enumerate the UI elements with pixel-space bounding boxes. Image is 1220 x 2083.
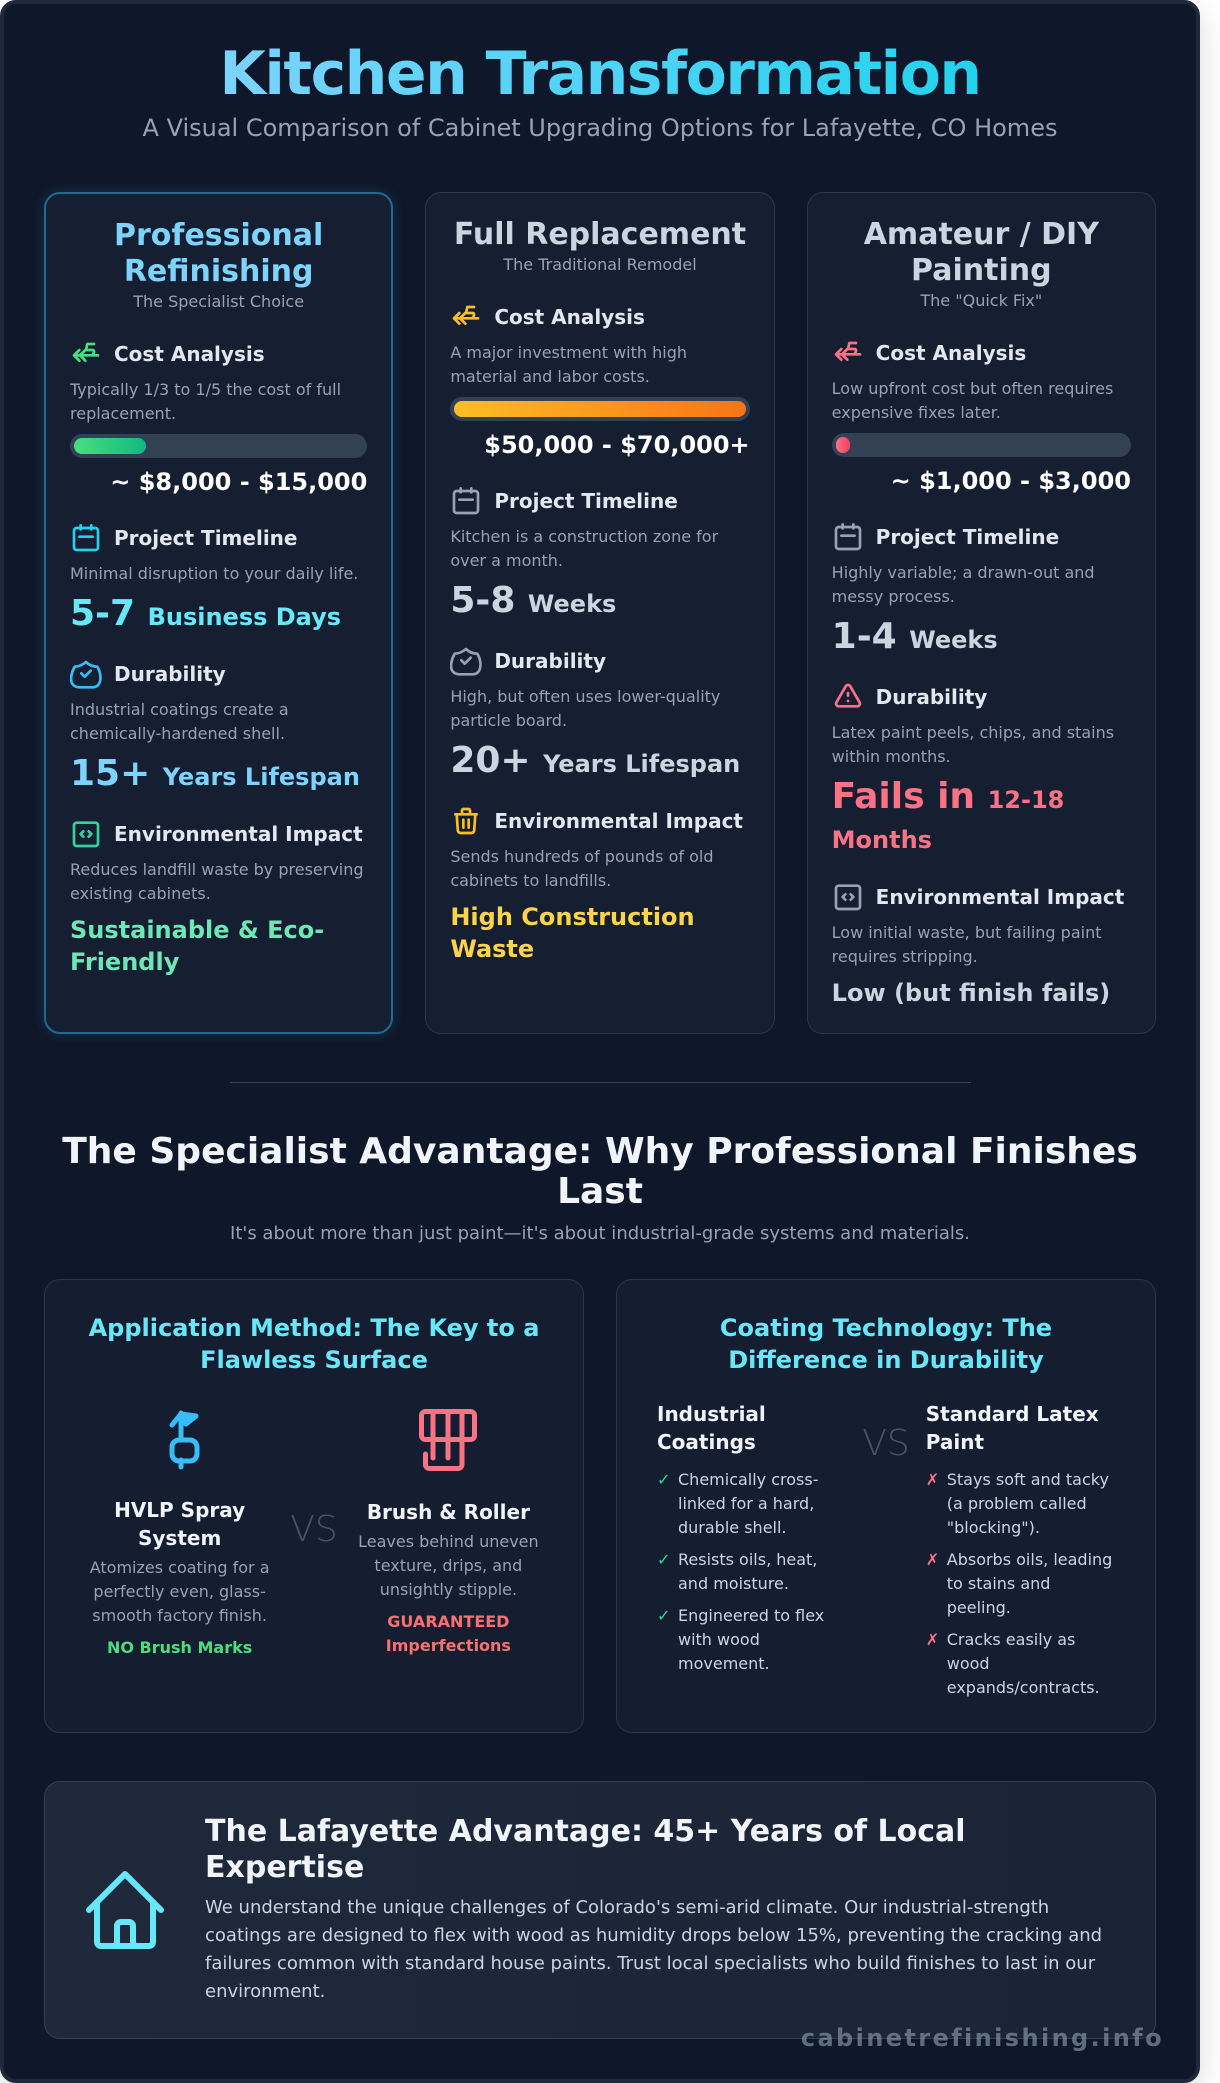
- icon: spray gun: [170, 1410, 200, 1470]
- column: standard latex paint: [918, 1400, 1123, 1708]
- panel: amateur DIY painting: [807, 192, 1156, 1034]
- callout body: We understand the unique challenges of Colorado's semi-arid climate. Our industrial-strength coatings are designed to flex with wood as humidity drops below 15%, preventing the cracking and failures common with standard house paints. Trust local specialists who build finishes to last in our environment.: [205, 1897, 1102, 2002]
- latex list: ✗: [926, 1470, 939, 1489]
- timeline description: Kitchen is a construction zone for over a month.: [450, 527, 718, 570]
- industrial list: Chemically cross-linked for a hard, durable shell.: [678, 1470, 818, 1537]
- industrial list: ✓: [657, 1470, 670, 1489]
- coating comparison: [657, 1402, 1112, 1697]
- callout text: [205, 1814, 1123, 2006]
- industrial list: [657, 1468, 846, 1676]
- cost description: A major investment with high material and labor costs.: [450, 343, 687, 386]
- industrial list: Resists oils, heat, and moisture.: [678, 1550, 817, 1593]
- durability description: Latex paint peels, chips, and stains within months.: [832, 723, 1114, 766]
- versus label: VS: [862, 1423, 910, 1464]
- durability heading with icon: [834, 684, 987, 709]
- section heading: specialist advantage: The Specialist Advantage: Why Professional Finishes Last: [62, 1131, 1138, 1212]
- latex list: ✗: [926, 1550, 939, 1569]
- cost value: ~ $1,000 - $3,000: [891, 467, 1131, 495]
- metric: durability: [832, 684, 1114, 854]
- durability heading with icon: Durability: [114, 662, 226, 686]
- timeline description: Highly variable; a drawn-out and messy process.: [832, 563, 1095, 606]
- latex list: [926, 1468, 1115, 1700]
- durability description: Industrial coatings create a chemically-hardened shell.: [70, 700, 289, 743]
- cost bar: [450, 397, 750, 421]
- card tagline: The Specialist Choice: [133, 292, 304, 311]
- panel: application method: [44, 1279, 584, 1733]
- metric: timeline: [832, 523, 1095, 657]
- card tagline: The Traditional Remodel: [503, 255, 697, 274]
- versus label: VS: [290, 1509, 338, 1550]
- timeline value: 5-7 Business Days: [70, 593, 341, 634]
- detail panels: [44, 1279, 1156, 1733]
- timeline value: 1-4 Weeks: [832, 616, 998, 657]
- spray description: Atomizes coating for a perfectly even, glass-smooth factory finish.: [90, 1558, 270, 1625]
- cost description: Low upfront cost but often requires expensive fixes later.: [832, 379, 1113, 422]
- callout heading: The Lafayette Advantage: 45+ Years of Local Expertise: [205, 1814, 966, 1885]
- environment heading with icon: Environmental Impact: [494, 809, 743, 833]
- industrial list: Engineered to flex with wood movement.: [678, 1606, 824, 1673]
- card heading: Professional Refinishing: [114, 218, 323, 289]
- spray result: NO Brush Marks: [107, 1638, 252, 1657]
- metric: durability: [450, 648, 740, 781]
- latex list: ✗: [926, 1630, 939, 1649]
- title: Kitchen Transformation: [219, 39, 981, 109]
- panel: coating technology: [616, 1279, 1156, 1733]
- brush result: GUARANTEED Imperfections: [386, 1612, 511, 1655]
- durability heading with icon: [450, 648, 606, 676]
- environment value: High Construction Waste: [450, 903, 695, 963]
- timeline heading with icon: Project Timeline: [876, 525, 1059, 549]
- cost heading with icon: Cost Analysis: [114, 342, 265, 366]
- latex list: Absorbs oils, leading to stains and peeling.: [947, 1550, 1112, 1617]
- panel heading: Application Method: The Key to a Flawless Surface: [89, 1314, 539, 1374]
- timeline heading with icon: Project Timeline: [114, 526, 297, 550]
- latex list: Stays soft and tacky (a problem called "blocking").: [947, 1470, 1109, 1537]
- environment heading with icon: Environmental Impact: [876, 885, 1124, 909]
- industrial list: ✓: [657, 1550, 670, 1569]
- durability heading with icon: Durability: [876, 685, 987, 709]
- environment description: Reduces landfill waste by preserving existing cabinets.: [70, 860, 364, 903]
- durability value: 15+ Years Lifespan: [70, 753, 360, 794]
- durability heading with icon: Durability: [494, 649, 606, 673]
- comparison cards: [40, 188, 1156, 1038]
- environment description: Sends hundreds of pounds of old cabinets to landfills.: [450, 847, 713, 890]
- industrial title: Industrial Coatings: [657, 1402, 766, 1454]
- environment value: Sustainable & Eco-Friendly: [70, 916, 324, 976]
- section subtitle: It's about more than just paint—it's about industrial-grade systems and materials.: [230, 1223, 970, 1244]
- metric: cost: [832, 341, 1131, 495]
- card tagline: The "Quick Fix": [920, 291, 1042, 310]
- panel heading: Coating Technology: The Difference in Durability: [720, 1314, 1052, 1374]
- metric: cost: [450, 305, 750, 459]
- icon: house: [77, 1862, 173, 1958]
- metric: environment: [70, 821, 364, 976]
- cost value: $50,000 - $70,000+: [484, 431, 750, 459]
- durability value: Fails in 12-18 Months: [832, 776, 1064, 854]
- industrial list: ✓: [657, 1606, 670, 1625]
- panel: full replacement: [425, 192, 775, 1034]
- metric: timeline: [70, 524, 358, 634]
- metric: cost: [70, 342, 367, 496]
- card heading: Amateur / DIY Painting: [864, 217, 1099, 288]
- header: [142, 39, 1057, 142]
- method comparison: [90, 1409, 539, 1657]
- metric: environment: [832, 884, 1124, 1007]
- brush description: Leaves behind uneven texture, drips, and unsightly stipple.: [358, 1532, 539, 1599]
- cost bar: [70, 434, 367, 458]
- latex list: Cracks easily as wood expands/contracts.: [947, 1630, 1100, 1697]
- cost description: Typically 1/3 to 1/5 the cost of full replacement.: [70, 380, 341, 423]
- environment heading with icon: Environmental Impact: [114, 822, 363, 846]
- metric: durability: [70, 660, 360, 794]
- durability description: High, but often uses lower-quality particle board.: [450, 687, 720, 730]
- latex title: Standard Latex Paint: [926, 1402, 1099, 1454]
- column: brush and roller: [358, 1409, 539, 1655]
- durability heading with icon: [70, 660, 226, 689]
- environment description: Low initial waste, but failing paint requires stripping.: [832, 923, 1101, 966]
- cost heading with icon: Cost Analysis: [876, 341, 1026, 365]
- cost value: ~ $8,000 - $15,000: [110, 468, 367, 496]
- cost bar: [832, 433, 1131, 457]
- watermark: cabinetrefinishing.info: [801, 2024, 1164, 2052]
- brush title: Brush & Roller: [367, 1500, 530, 1524]
- subtitle: A Visual Comparison of Cabinet Upgrading Options for Lafayette, CO Homes: [143, 114, 1057, 142]
- panel: professional refinishing: [44, 192, 393, 1034]
- column: HVLP spray: [90, 1410, 270, 1657]
- durability value: 20+ Years Lifespan: [450, 740, 740, 781]
- cost heading with icon: Cost Analysis: [494, 305, 645, 329]
- column: industrial coatings: [657, 1402, 824, 1673]
- timeline value: 5-8 Weeks: [450, 580, 616, 621]
- metric: environment: [450, 808, 743, 963]
- callout: Lafayette advantage: [44, 1781, 1156, 2039]
- timeline heading with icon: Project Timeline: [494, 489, 678, 513]
- metric: timeline: [450, 487, 718, 621]
- spray title: HVLP Spray System: [114, 1498, 245, 1550]
- card heading: Full Replacement: [454, 217, 746, 252]
- timeline description: Minimal disruption to your daily life.: [70, 564, 358, 583]
- environment value: Low (but finish fails): [832, 979, 1110, 1007]
- icon: brush: [419, 1409, 477, 1471]
